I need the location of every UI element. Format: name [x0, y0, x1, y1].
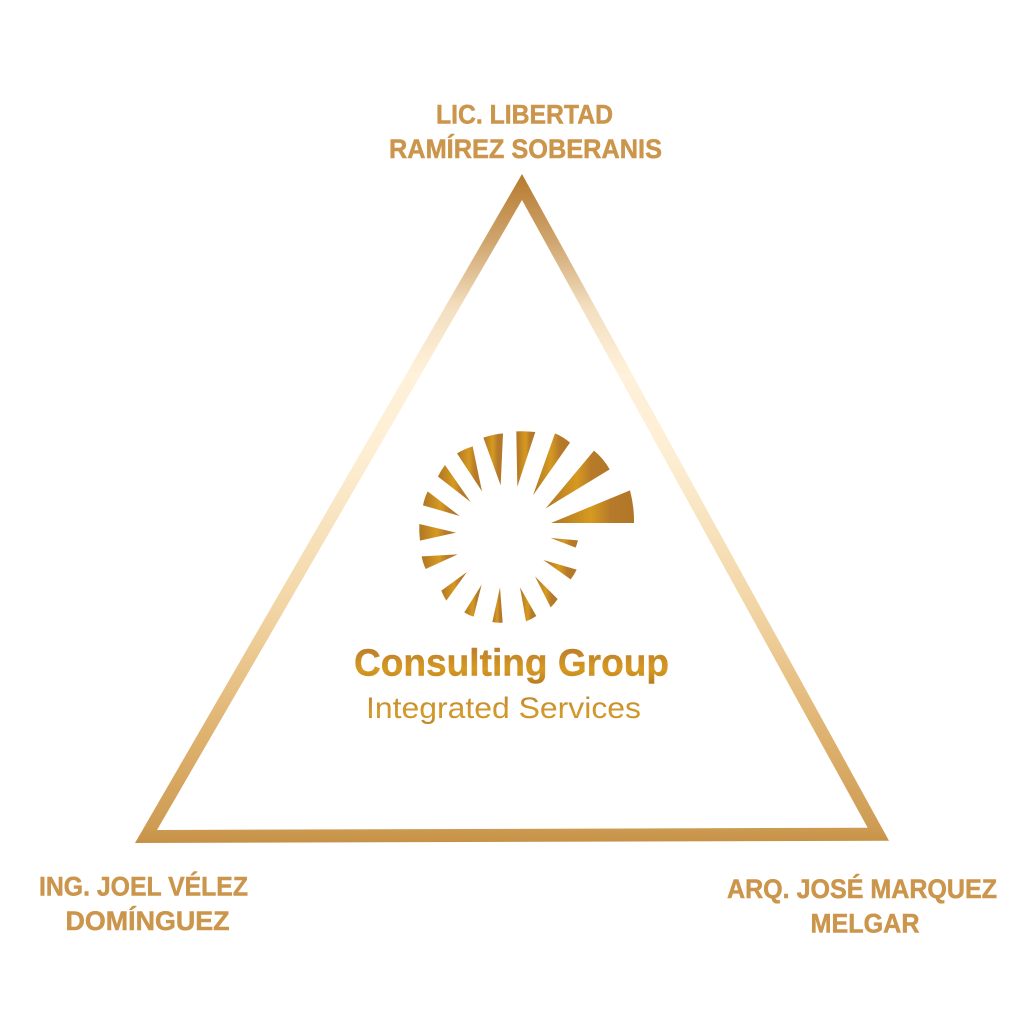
- logo: [354, 431, 669, 725]
- name line 1: ARQ. JOSÉ MARQUEZ: [727, 874, 997, 904]
- name: bottom-right vertex: [727, 874, 997, 939]
- name line 2: RAMÍREZ SOBERANIS: [389, 134, 662, 164]
- name: top vertex: [389, 99, 662, 164]
- name: bottom-left vertex: [39, 872, 248, 936]
- icon: spiral sunburst of gold rays: [419, 431, 634, 623]
- gold triangle frame: [135, 174, 889, 843]
- name line 1: LIC. LIBERTAD: [436, 99, 613, 129]
- name line 1: ING. JOEL VÉLEZ: [39, 872, 248, 902]
- logo title: Consulting Group: [354, 642, 669, 684]
- name line 2: MELGAR: [810, 909, 920, 939]
- logo subtitle: Integrated Services: [366, 692, 641, 725]
- name line 2: DOMÍNGUEZ: [66, 906, 230, 936]
